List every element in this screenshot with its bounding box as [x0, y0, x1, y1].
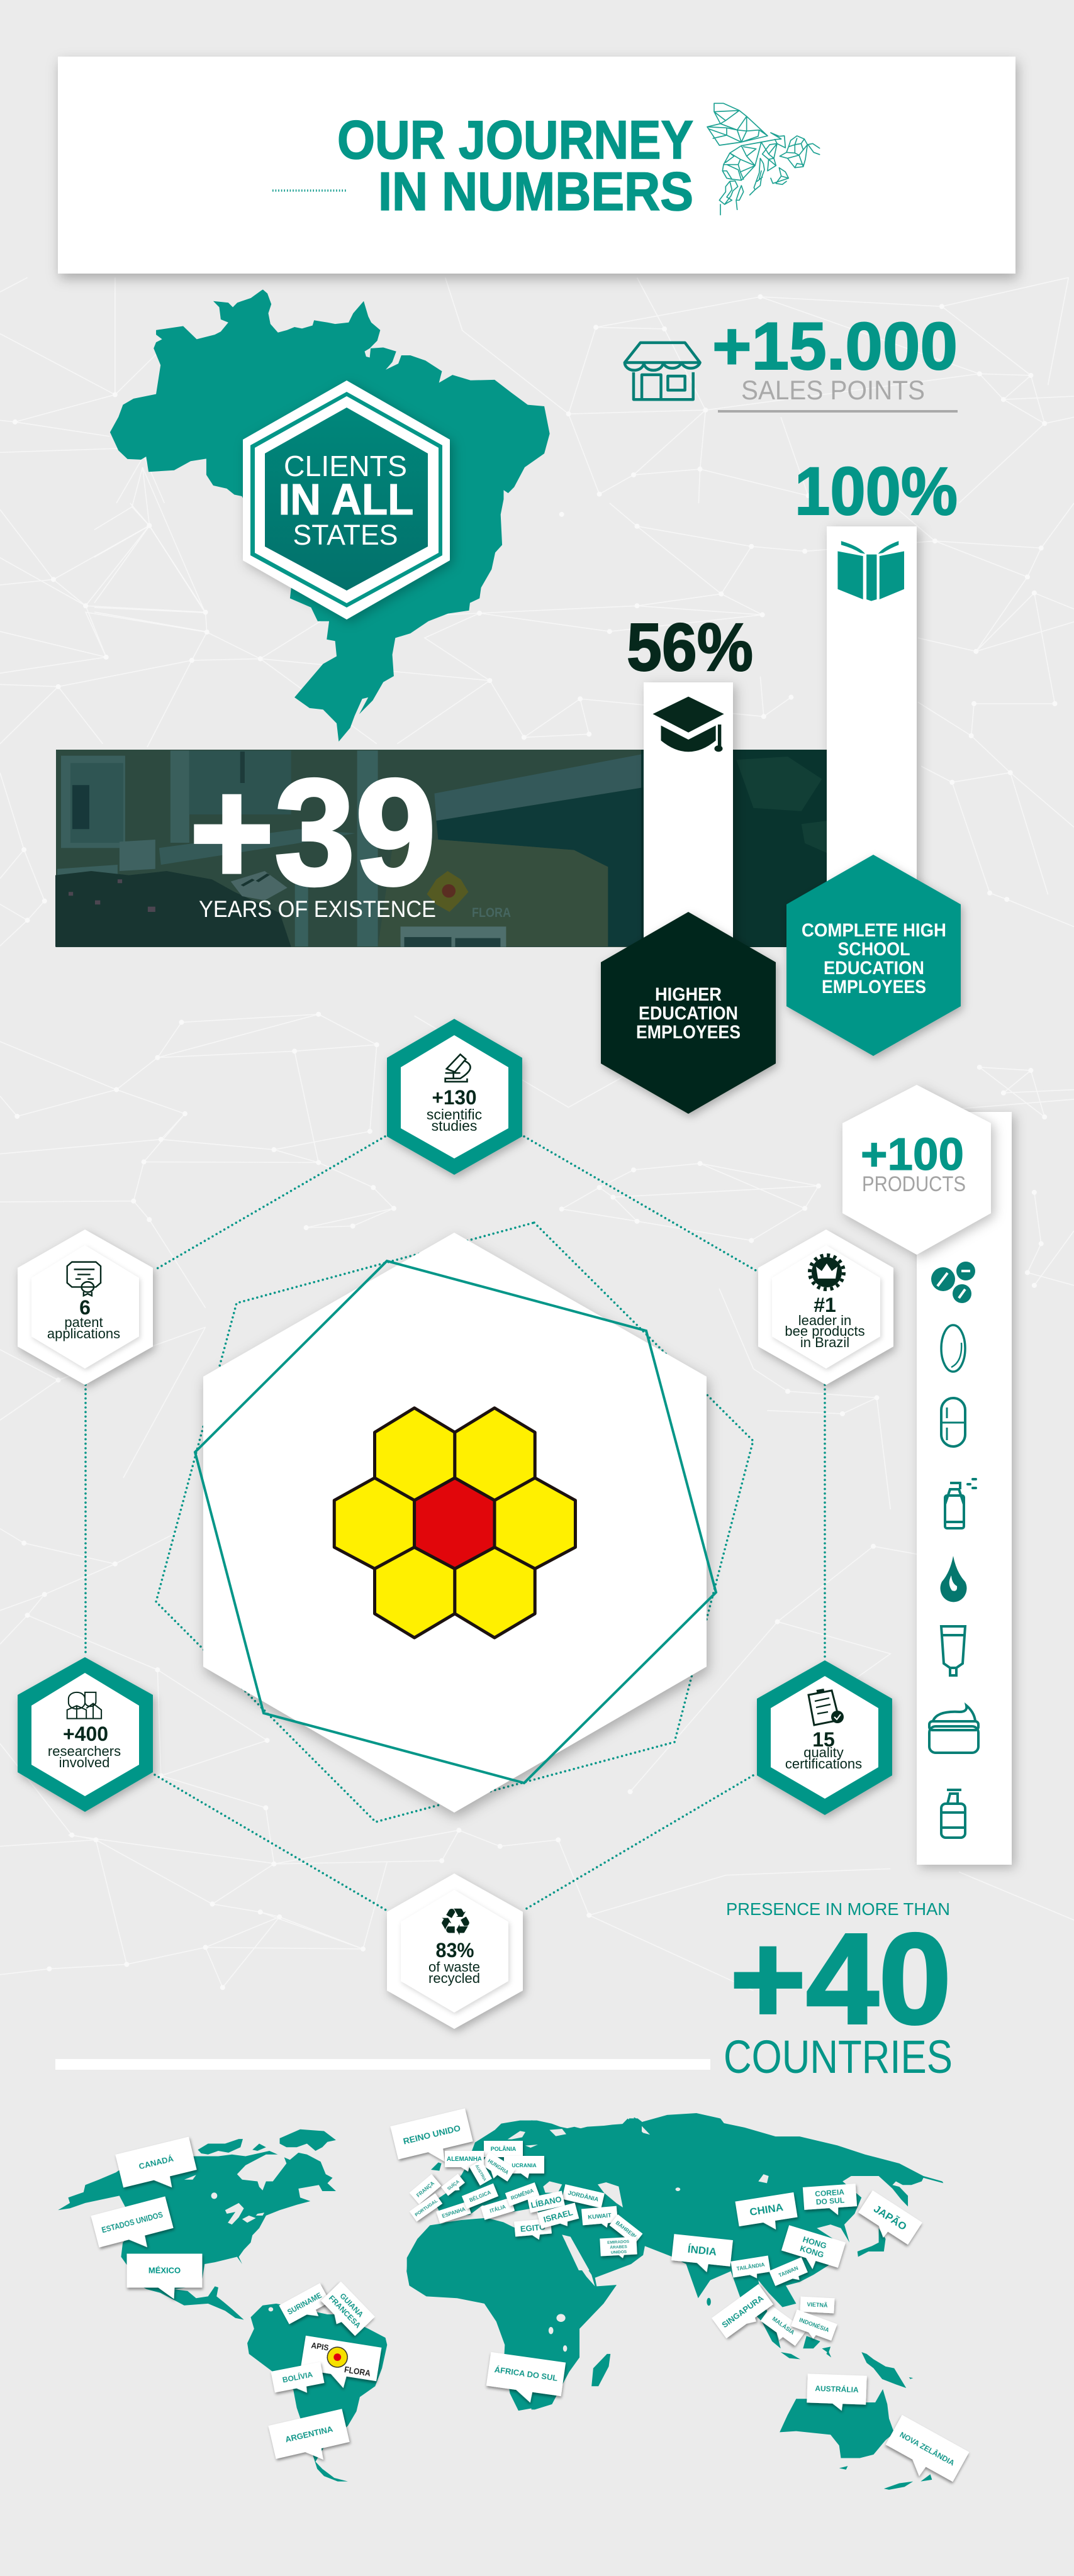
hexagon: patent applications: [18, 1230, 153, 1385]
label: poland: [484, 2141, 523, 2157]
label: south korea: COREIA: [815, 2187, 845, 2199]
text: certifications: [785, 1756, 862, 1772]
label: french guiana: GUIANA: [338, 2292, 365, 2319]
panel: products column: [842, 1085, 1012, 1865]
big number: +39: [189, 748, 436, 916]
icon: pump bottle: [941, 1790, 965, 1838]
south america: [247, 2304, 387, 2482]
sales points stat: [625, 308, 958, 413]
label: new zealand: NOVA ZELÂNDIA: [898, 2429, 956, 2468]
text: in Brazil: [800, 1335, 849, 1350]
hexagon: quality certifications: [757, 1660, 892, 1815]
hexagon: leader in bee products: [758, 1230, 893, 1385]
text: +400: [63, 1723, 108, 1745]
label: suriname: [279, 2283, 333, 2330]
text: quality: [803, 1745, 844, 1760]
label: vietnam: VIETNÃ: [807, 2301, 828, 2309]
label: united kingdom: REINO UNIDO: [402, 2123, 462, 2146]
north america: [58, 2151, 336, 2320]
kicker: PRESENCE IN MORE THAN: [726, 1899, 950, 1919]
label: austria: ÁUSTRIA: [474, 2163, 488, 2182]
panel: years of existence photo banner: [55, 748, 827, 947]
label: india: [671, 2234, 733, 2275]
badge text: [278, 450, 414, 551]
white rule: [55, 2059, 710, 2070]
label: united states: ESTADOS UNIDOS: [101, 2209, 164, 2235]
label: french guiana: FRANCESA: [327, 2294, 362, 2330]
label: spain: ESPANHA: [441, 2206, 466, 2219]
label: bolivia: [271, 2362, 325, 2399]
label: poland: POLÂNIA: [491, 2145, 517, 2152]
islands: [591, 2354, 610, 2386]
label: indonesia: [790, 2309, 837, 2345]
title: OUR JOURNEY: [337, 110, 693, 170]
100 percent column: [786, 453, 961, 1056]
label: france: [410, 2174, 441, 2204]
brazil map: [110, 289, 550, 741]
label: belgium: BÉLGICA: [469, 2189, 492, 2203]
label: japan: JAPÃO: [871, 2202, 909, 2233]
text: scientific: [427, 1106, 482, 1123]
label: united arab emirates: EMIRADOS: [607, 2240, 630, 2245]
label: lebanon: [527, 2190, 565, 2213]
text: [48, 1723, 121, 1770]
title: IN NUMBERS: [378, 162, 693, 222]
number: +15.000: [712, 308, 958, 384]
label: taiwan: TAIWAN: [778, 2265, 799, 2279]
icon: graduation cap: [652, 697, 724, 752]
icon: softgel: [941, 1325, 965, 1372]
text: +130: [432, 1086, 477, 1109]
background network pattern: [0, 277, 1074, 1990]
label: argentina: [268, 2409, 352, 2470]
caption: YEARS OF EXISTENCE: [199, 896, 436, 922]
text: leader in: [798, 1313, 851, 1328]
icon: pills: [931, 1262, 975, 1303]
label: south africa: [484, 2352, 566, 2407]
clients hexagon badge: [243, 380, 450, 619]
label: hong kong: HONG: [802, 2235, 828, 2251]
label: united arab emirates: [600, 2237, 637, 2259]
label: jordan: [562, 2184, 605, 2208]
text: [47, 1296, 120, 1341]
label: egypt: [514, 2219, 552, 2241]
label: south korea: DO SUL: [815, 2196, 845, 2207]
label: united states: [91, 2196, 176, 2259]
text: #1: [814, 1294, 836, 1316]
dark hexagon: [601, 912, 776, 1114]
label: switzerland: SUÍÇA: [446, 2179, 461, 2192]
icon: recycle: ♻: [439, 1901, 473, 1945]
icon: clipboard: [808, 1689, 844, 1725]
text: applications: [47, 1326, 120, 1341]
label: malaysia: [758, 2306, 806, 2350]
label: bahrain: [610, 2214, 642, 2245]
label: romania: ROMÊNIA: [510, 2188, 535, 2201]
label: brazil with logo: FLORA: [344, 2364, 371, 2379]
label: italy: ITÁLIA: [489, 2204, 506, 2214]
icon: capsule: [941, 1398, 965, 1446]
photo sign text: FLORA: [472, 906, 511, 920]
label: thailand: TAILÂNDIA: [736, 2261, 765, 2272]
eurasia and east africa: [532, 2113, 943, 2409]
icon: crown seal: [810, 1255, 844, 1289]
label: thailand: [730, 2255, 771, 2282]
teal hexagon: SCHOOL: [838, 939, 910, 960]
label: indonesia: INDONÉSIA: [798, 2317, 831, 2333]
australia: [780, 2389, 894, 2458]
label: south africa: ÁFRICA DO SUL: [494, 2365, 558, 2383]
label: belgium: [462, 2184, 498, 2209]
icon: spray: [945, 1479, 976, 1528]
caption: COUNTRIES: [724, 2031, 953, 2083]
badge text: STATES: [293, 519, 398, 551]
label: hungary: HUNGRIA: [487, 2158, 510, 2175]
text: of waste: [428, 1959, 480, 1975]
label: switzerland: [441, 2174, 466, 2198]
world map: [58, 2108, 969, 2492]
label: argentina: ARGENTINA: [284, 2424, 334, 2444]
label: suriname: SURINAME: [286, 2290, 323, 2317]
label: australia: [807, 2373, 867, 2412]
text: 15: [812, 1728, 835, 1751]
label: china: [735, 2192, 799, 2235]
label: france: FRANÇA: [415, 2180, 435, 2199]
caption: SALES POINTS: [741, 375, 925, 406]
label: israel: ISRAEL: [542, 2207, 574, 2224]
text: patent: [64, 1314, 103, 1330]
rotated dotted hexagon: [156, 1223, 753, 1822]
hexagon: scientific studies: [387, 1019, 522, 1175]
africa west: [406, 2219, 535, 2411]
label: brazil with logo: [299, 2336, 381, 2393]
centre white hexagon: [203, 1233, 707, 1813]
label: hong kong: [779, 2225, 846, 2276]
label: taiwan: [769, 2257, 809, 2289]
hexagon: products: [842, 1085, 991, 1255]
label: australia: AUSTRÁLIA: [815, 2384, 859, 2394]
label: ukraine: [504, 2156, 544, 2179]
teal hexagon: COMPLETE HIGH: [802, 920, 946, 941]
countries stat: [55, 1899, 953, 2083]
title: [337, 110, 693, 222]
dark hexagon: EDUCATION: [639, 1003, 738, 1024]
white bar: [644, 682, 733, 984]
label: italy: [481, 2197, 515, 2220]
label: hungary: [478, 2151, 516, 2185]
text: studies: [432, 1118, 477, 1134]
icon: microscope: [445, 1055, 471, 1082]
label: bahrain: BAHREIN: [615, 2219, 637, 2240]
text: 6: [79, 1296, 91, 1319]
label: kuwait: KUWAIT: [588, 2212, 612, 2221]
label: romania: [505, 2182, 539, 2206]
icon: researchers: [67, 1692, 101, 1719]
icon: open book: [837, 541, 904, 601]
label: french guiana: [317, 2282, 375, 2340]
logo: honeycomb flower: [334, 1408, 575, 1638]
label: kuwait: [581, 2206, 618, 2229]
label: austria: [469, 2160, 492, 2185]
label: vietnam: [800, 2297, 835, 2313]
text: researchers: [48, 1743, 121, 1759]
label: spain: [436, 2201, 471, 2224]
label: singapore: SINGAPURA: [720, 2293, 766, 2329]
teal hexagon: EDUCATION: [824, 958, 924, 979]
underline: [718, 410, 958, 413]
label: canada: CANADÁ: [138, 2153, 175, 2171]
label: canada: [115, 2137, 199, 2199]
text: involved: [59, 1755, 109, 1770]
label: china: CHINA: [749, 2201, 784, 2218]
label: israel: [537, 2202, 580, 2233]
label: japan: [854, 2190, 922, 2251]
text: 83%: [435, 1939, 474, 1962]
white bar: [827, 526, 917, 904]
text: bee products: [785, 1323, 865, 1339]
label: ukraine: UCRANIA: [512, 2162, 537, 2168]
label: egypt: EGITO: [520, 2222, 546, 2234]
label: singapore: [712, 2284, 775, 2341]
hexagon: waste recycled: [387, 1874, 523, 2029]
badge text: IN ALL: [278, 475, 414, 524]
dark hexagon: EMPLOYEES: [636, 1022, 741, 1043]
icon: low poly bee: [707, 103, 820, 215]
percent: 56%: [627, 609, 753, 685]
icon: drop: [941, 1556, 967, 1602]
photo: dark right side: [641, 750, 827, 947]
hexagon: researchers involved: [18, 1657, 153, 1812]
label: malaysia: MALÁSIA: [771, 2316, 796, 2336]
text: recycled: [428, 1970, 480, 1986]
europe: [434, 2118, 642, 2241]
label: united arab emirates: UNIDOS: [611, 2250, 627, 2255]
label: lebanon: LÍBANO: [530, 2194, 562, 2210]
label: south korea: [803, 2184, 858, 2218]
connector dotted lines: [86, 1136, 825, 1911]
text: [785, 1294, 865, 1350]
header panel: [58, 57, 1015, 274]
label: mexico: MÉXICO: [148, 2265, 181, 2275]
label: germany: [445, 2151, 484, 2172]
text: [785, 1728, 862, 1772]
teal hexagon: [786, 855, 961, 1056]
percent: 100%: [795, 453, 958, 529]
hexagon: products: +100: [861, 1130, 964, 1180]
label: united arab emirates: ÁRABES: [610, 2243, 628, 2250]
rotated teal hexagon outline: [195, 1261, 716, 1783]
label: portugal: [410, 2193, 442, 2222]
label: bolivia: BOLÍVIA: [282, 2369, 314, 2385]
56 percent column: [601, 609, 776, 1114]
label: hong kong: KONG: [799, 2243, 825, 2260]
icon: tube: [941, 1626, 965, 1675]
dark hexagon: HIGHER: [655, 984, 722, 1005]
label: germany: ALEMANHA: [447, 2156, 482, 2163]
label: new zealand: [880, 2415, 969, 2492]
dotted rule: [272, 189, 346, 192]
text: [428, 1939, 480, 1986]
label: portugal: PORTUGAL: [413, 2197, 439, 2218]
label: brazil with logo: APIS: [311, 2340, 330, 2353]
big number: +40: [730, 1907, 951, 2051]
teal hexagon: EMPLOYEES: [822, 977, 926, 997]
badge text: CLIENTS: [284, 450, 407, 482]
label: mexico: [127, 2254, 203, 2299]
label: jordan: JORDÂNIA: [567, 2189, 600, 2203]
hexagon: products: PRODUCTS: [862, 1172, 966, 1196]
label: india: ÍNDIA: [687, 2243, 717, 2258]
icon: jar: [929, 1706, 978, 1753]
label: united kingdom: [390, 2108, 476, 2172]
icon: certificate: [67, 1262, 101, 1296]
icon: store: [625, 343, 700, 399]
text: [427, 1086, 482, 1134]
